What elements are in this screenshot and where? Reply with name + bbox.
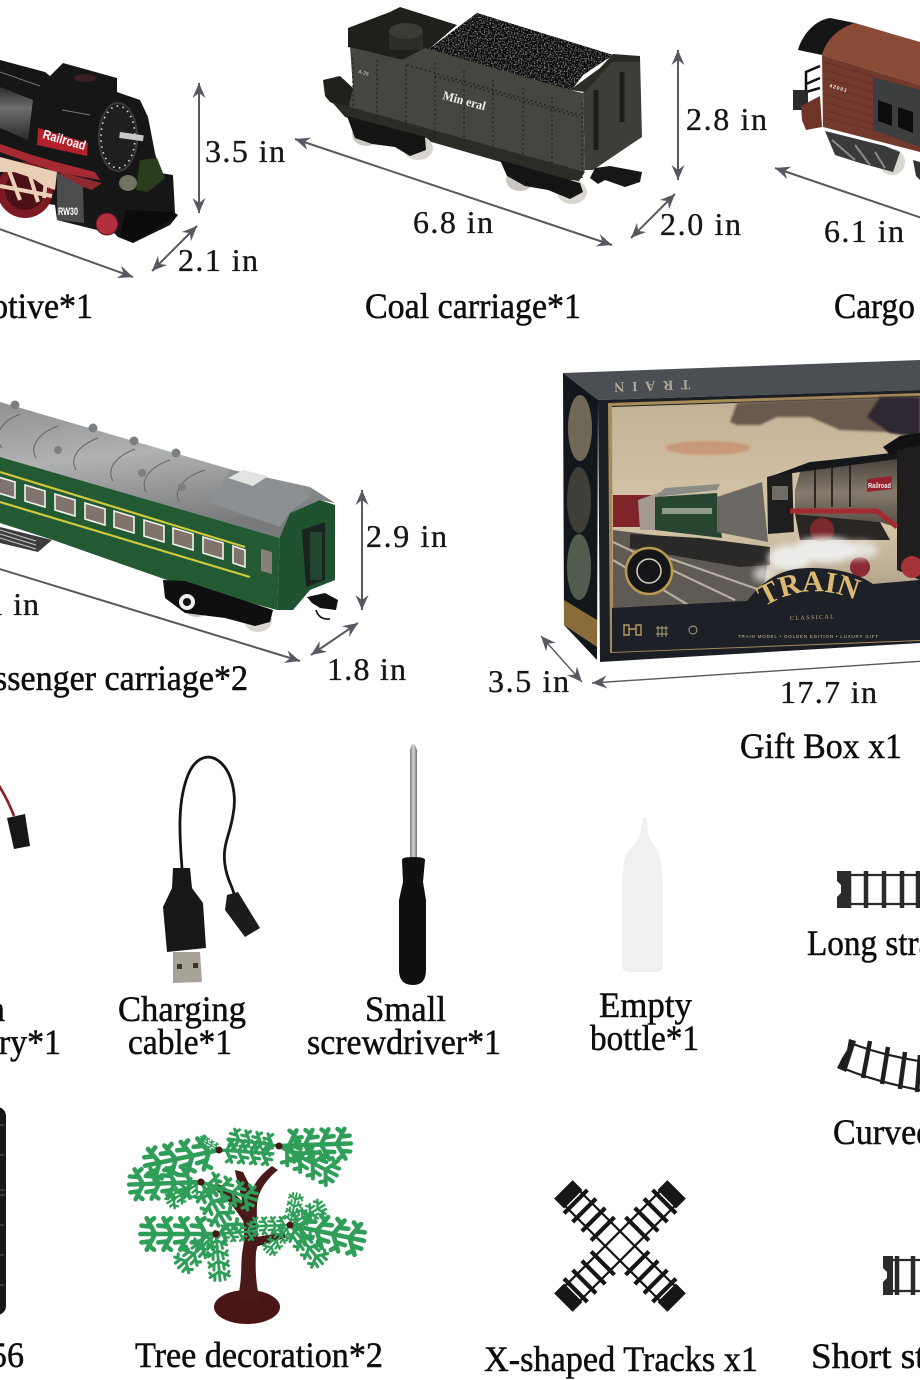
label: lithium battery — [0, 989, 61, 1062]
dimension: cargo carriage — [775, 168, 920, 249]
bogie — [163, 580, 338, 632]
dimension: coal carriage — [295, 50, 767, 245]
accessory: remote control — [0, 1107, 6, 1315]
arrow: passenger width — [311, 623, 358, 655]
product: passenger carriage — [0, 400, 338, 632]
label: gift box: Gift Box x1 — [740, 726, 902, 766]
box art: title band — [612, 568, 920, 652]
rivet lines — [353, 58, 582, 178]
branch nodes — [198, 1142, 294, 1238]
value: 6.1 in: 6.1 in — [824, 213, 904, 249]
carriage end — [277, 500, 335, 610]
windows — [0, 476, 272, 574]
bogie: front — [500, 160, 642, 204]
value: 2.8 in: 2.8 in — [686, 101, 767, 137]
label: empty bottle — [590, 985, 699, 1058]
box front — [598, 390, 920, 662]
label: X-shaped tracks: X-shaped Tracks x1 — [484, 1339, 758, 1379]
brown side — [822, 55, 920, 152]
product: gift box: TRAIN — [614, 376, 690, 394]
arrow: passenger height — [361, 490, 363, 610]
box top — [563, 360, 920, 400]
product: locomotive: RW30 — [58, 206, 78, 218]
bogie — [825, 131, 920, 180]
value: 2.1 in: 2.1 in — [178, 242, 258, 278]
box art: bottom icons and feature line — [624, 625, 878, 639]
roof end block — [210, 470, 310, 527]
box art: steam — [753, 537, 878, 582]
tree base and trunk — [214, 1290, 280, 1324]
arrow: passenger length — [0, 563, 300, 661]
arrow: locomotive length — [0, 222, 133, 277]
accessory: tree decoration — [129, 1128, 367, 1324]
arrow: box depth — [541, 636, 582, 682]
box side — [563, 373, 598, 660]
product: cargo carriage: 42001 — [828, 83, 848, 94]
box art: train — [613, 433, 920, 580]
Railroad nameplate: Railroad — [41, 126, 88, 153]
label: empty bottle: Empty — [599, 985, 692, 1025]
coal load — [428, 13, 613, 92]
arrow: locomotive height — [198, 83, 200, 213]
Mineral lettering: Min eral — [441, 88, 488, 113]
label: charging cable: cable*1 — [128, 1022, 232, 1062]
label: screwdriver: screwdriver*1 — [307, 1022, 501, 1062]
arrow: coal height — [677, 50, 679, 180]
carriage end — [583, 55, 642, 170]
value: 2.0 in: 2.0 in — [660, 206, 741, 242]
box art: TRAIN title: TRAIN — [756, 572, 862, 604]
accessory: lithium battery connector — [0, 784, 30, 849]
carriage side — [330, 47, 585, 183]
accessory: screwdriver — [399, 744, 426, 985]
accessory: short straight track — [883, 1256, 920, 1295]
accessory: long straight track — [837, 871, 920, 908]
value: 1.8 in: 1.8 in — [327, 651, 406, 687]
value: 2.9 in: 2.9 in — [366, 518, 447, 554]
arrow: box length — [592, 660, 920, 683]
accessory: curved track — [837, 1039, 920, 1092]
product: cargo carriage — [793, 18, 920, 180]
product: locomotive — [0, 60, 178, 243]
label: tree decoration: Tree decoration*2 — [135, 1335, 383, 1375]
product: coal carriage — [323, 7, 642, 204]
arrow: cargo length — [775, 168, 920, 231]
roof ventilators — [10, 400, 186, 491]
smokebox front — [99, 103, 137, 171]
dimension: passenger carriage — [0, 490, 447, 687]
box art: smoke clouds — [665, 397, 920, 455]
dimension: locomotive — [0, 83, 285, 278]
rear hopper — [348, 7, 457, 60]
value: 17.7 in: 17.7 in — [780, 674, 877, 710]
product: gift box — [563, 360, 920, 662]
foliage — [129, 1128, 367, 1281]
box art: trackbed — [613, 530, 770, 610]
product: coal carriage: A-25 — [357, 69, 369, 78]
label: charging cable: Charging — [118, 989, 246, 1029]
yellow stripes — [0, 472, 250, 577]
box art: medal — [626, 548, 672, 594]
arrow: coal length — [295, 139, 612, 245]
driving wheels — [0, 162, 53, 218]
arrow: coal width — [631, 194, 675, 238]
accessory: X-shaped tracks — [552, 1178, 688, 1314]
arrow: locomotive width — [152, 226, 197, 271]
accessory: charging cable — [163, 757, 260, 983]
label: coal carriage: Coal carriage*1 — [365, 286, 581, 326]
box art: bottom icons and feature line: TRAIN MODEL • GOLDEN EDITION • LUXURY GIFT — [738, 634, 878, 639]
black roof end — [798, 18, 855, 55]
roof — [0, 402, 335, 538]
label: empty bottle: bottle*1 — [590, 1018, 699, 1058]
lower frame — [332, 102, 585, 184]
box art: CLASSICAL badge: CLASSICAL — [790, 614, 834, 622]
brown roof — [822, 23, 920, 85]
value: 3.5 in: 3.5 in — [488, 663, 569, 699]
green side — [0, 457, 280, 610]
accessory: empty bottle — [622, 818, 663, 972]
value: 3.5 in: 3.5 in — [205, 133, 285, 169]
dimension: gift box — [488, 636, 920, 710]
locomotive silhouette — [0, 60, 178, 243]
label: charging cable — [118, 989, 246, 1062]
box art: sky — [612, 397, 920, 607]
underbody vent — [0, 527, 52, 552]
bogie: rear — [347, 116, 433, 160]
front railing — [806, 66, 820, 100]
label: screwdriver: Small — [365, 989, 446, 1029]
label: screwdriver — [307, 989, 501, 1062]
value: 6.8 in: 6.8 in — [413, 204, 493, 240]
box art: train: Railroad — [868, 483, 891, 490]
grey door panel — [873, 77, 920, 147]
